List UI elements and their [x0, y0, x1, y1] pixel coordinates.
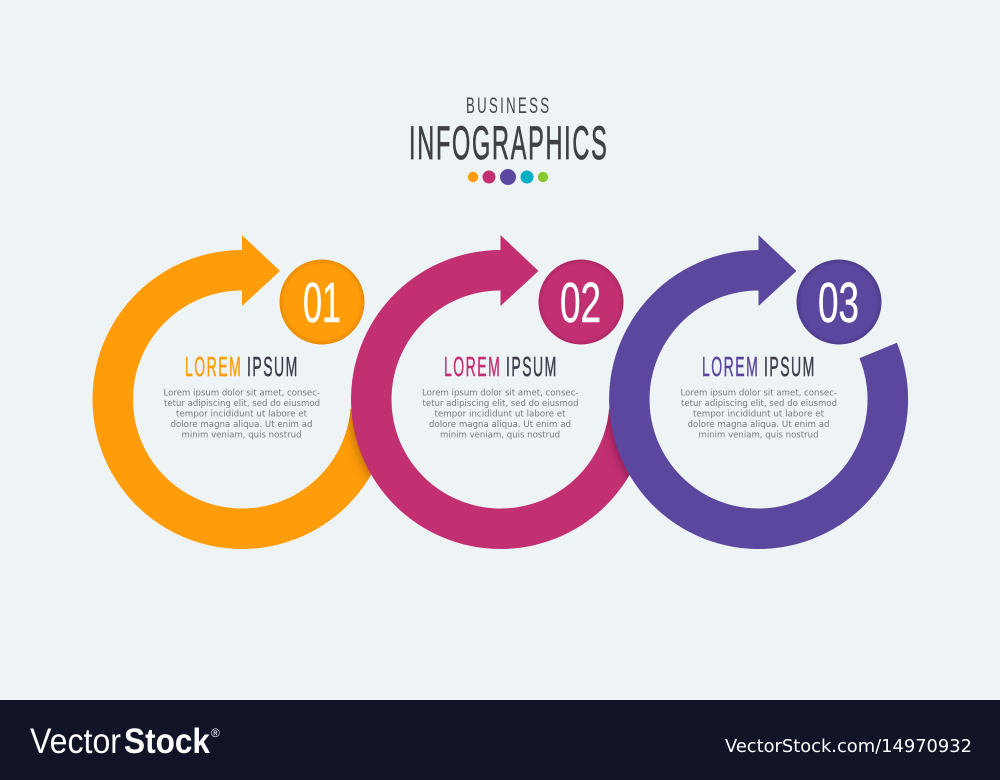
heading 3: LOREM	[702, 351, 759, 382]
body 1	[164, 388, 320, 440]
footer logo: Vector	[30, 722, 121, 761]
heading 2: LOREM	[444, 351, 501, 382]
body 2	[422, 388, 578, 440]
registered mark: ®	[211, 726, 220, 740]
body 3: minim veniam, quis nostrud	[698, 430, 818, 440]
number badge 02: 02	[560, 271, 601, 335]
heading 1: IPSUM	[247, 351, 299, 382]
footer image id: VectorStock.com/14970932	[725, 736, 972, 757]
body 3: tetur adipiscing elit, sed do eiusmod	[681, 398, 837, 408]
arrow ring 3: purple	[609, 235, 908, 549]
heading: infographics: INFOGRAPHICS	[409, 116, 609, 169]
body 2: minim veniam, quis nostrud	[440, 430, 560, 440]
number badge 03: 03	[818, 271, 859, 335]
body 2: dolore magna aliqua. Ut enim ad	[429, 419, 571, 429]
body 1: Lorem ipsum dolor sit amet, consec-	[164, 388, 320, 398]
shadow of ring 3 on ring 2	[605, 408, 630, 482]
footer bar	[0, 700, 1000, 780]
shadow of ring 2 on ring 1	[346, 408, 372, 482]
text block 2	[422, 351, 578, 440]
number badge 01	[280, 260, 364, 344]
heading 3	[702, 351, 816, 382]
heading 1: LOREM	[185, 351, 242, 382]
title block	[409, 94, 609, 185]
body 2: tetur adipiscing elit, sed do eiusmod	[422, 398, 578, 408]
number badge 03	[796, 260, 882, 344]
text block 1	[164, 351, 320, 440]
heading 3: IPSUM	[764, 351, 816, 382]
heading 1	[185, 351, 299, 382]
body 1: tempor incididunt ut labore et	[176, 408, 308, 418]
heading: business: BUSINESS	[466, 94, 551, 118]
arrow ring 1: orange	[93, 235, 391, 549]
number badge 02	[538, 260, 624, 344]
body 1: tetur adipiscing elit, sed do eiusmod	[164, 398, 320, 408]
body 3	[680, 388, 837, 440]
body 3: tempor incididunt ut labore et	[693, 408, 825, 418]
body 3: dolore magna aliqua. Ut enim ad	[688, 419, 830, 429]
body 1: dolore magna aliqua. Ut enim ad	[170, 419, 312, 429]
body 1: minim veniam, quis nostrud	[182, 430, 302, 440]
body 3: Lorem ipsum dolor sit amet, consec-	[680, 388, 837, 398]
body 2: tempor incididunt ut labore et	[434, 408, 566, 418]
number badge 01: 01	[303, 271, 341, 335]
body 2: Lorem ipsum dolor sit amet, consec-	[422, 388, 578, 398]
heading 2	[444, 351, 558, 382]
text block 3	[680, 351, 837, 440]
colored dots	[468, 169, 548, 185]
arrow ring 2: magenta	[351, 235, 649, 549]
footer logo: Stock	[124, 722, 210, 761]
heading 2: IPSUM	[506, 351, 558, 382]
